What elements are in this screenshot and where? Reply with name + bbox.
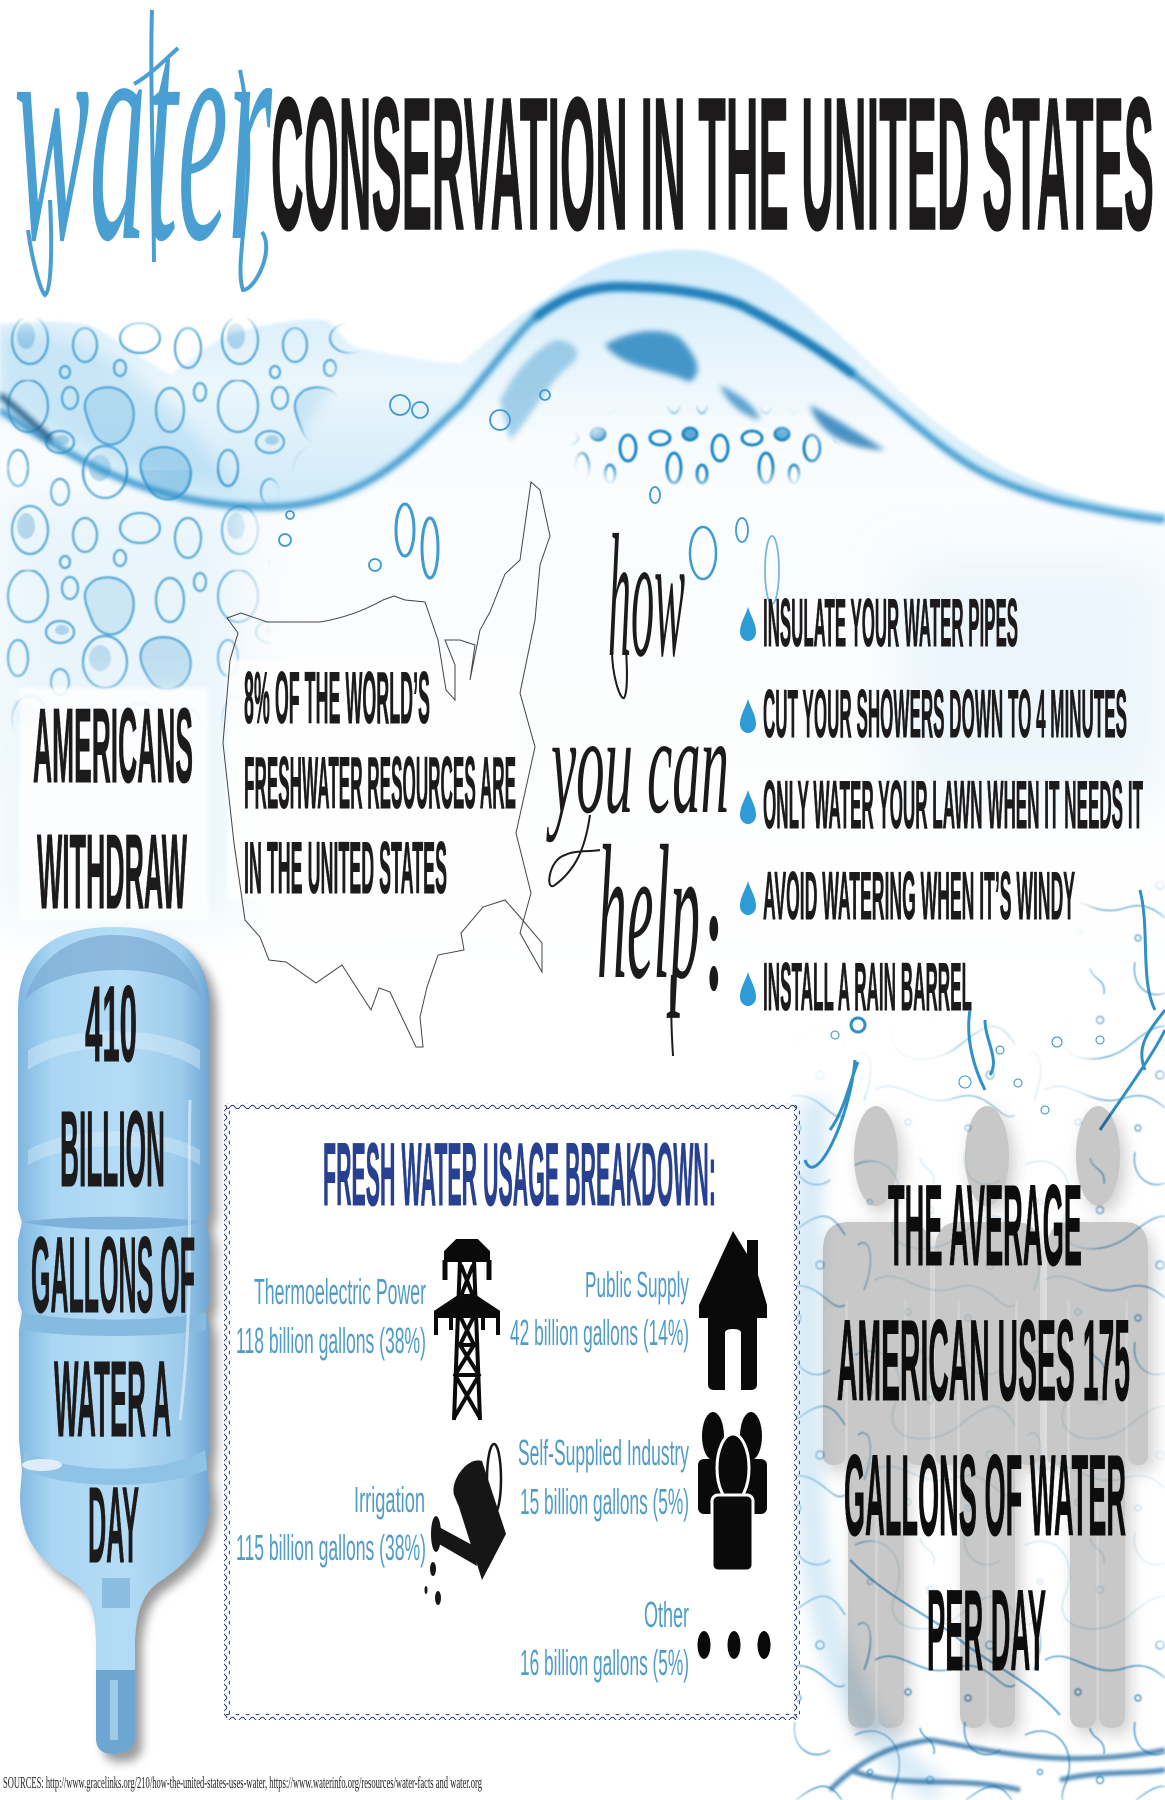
panel: usage breakdown: Self-Supplied Industry bbox=[518, 1432, 689, 1473]
white box behind Americans bbox=[19, 688, 208, 920]
US map outline bbox=[223, 482, 550, 1047]
text: DAY bbox=[88, 1465, 139, 1585]
text: 8 percent bbox=[244, 658, 516, 909]
text: 410 bbox=[85, 964, 137, 1084]
heading: how you can help: help bbox=[597, 806, 700, 1019]
heading: how you can help: : bbox=[705, 851, 723, 1024]
icon: people group bbox=[698, 1412, 767, 1571]
panel: usage breakdown: Other bbox=[644, 1594, 689, 1635]
icon: drop bbox=[740, 972, 756, 1006]
bubbles bbox=[279, 390, 779, 604]
label: public supply bbox=[510, 1264, 689, 1353]
panel: usage breakdown bbox=[224, 1103, 800, 1720]
text: WATER A bbox=[54, 1339, 171, 1459]
label: thermoelectric bbox=[236, 1271, 426, 1361]
text: BILLION bbox=[60, 1089, 165, 1209]
heading: how you can help: you can bbox=[546, 687, 729, 843]
panel: usage breakdown: 16 billion gallons (5%) bbox=[520, 1642, 689, 1683]
sources: SOURCES: http://www.gracelinks.org/210/how-the-united-states-uses-water, https://www.waterinfo.org/resources/water-facts and water.org bbox=[3, 1773, 482, 1792]
icon: drop bbox=[740, 790, 756, 824]
panel: usage breakdown: Public Supply bbox=[585, 1264, 689, 1305]
text: average American bbox=[837, 1161, 1130, 1695]
panel: usage breakdown: 115 billion gallons (38%) bbox=[236, 1527, 426, 1568]
label: irrigation: Irrigation bbox=[354, 1479, 425, 1520]
icon: drop bbox=[740, 881, 756, 915]
water splash bbox=[790, 880, 1165, 1800]
panel: usage breakdown: 42 billion gallons (14%) bbox=[510, 1312, 689, 1353]
text: IN THE UNITED STATES bbox=[244, 828, 447, 909]
icon: power tower bbox=[436, 1241, 498, 1420]
white box behind map label bbox=[227, 660, 517, 900]
icon: drop bbox=[740, 699, 756, 733]
label: other bbox=[520, 1594, 689, 1683]
water bottle bbox=[18, 927, 210, 1754]
panel: usage breakdown: Thermoelectric Power bbox=[254, 1271, 426, 1312]
icon: house bbox=[699, 1231, 767, 1390]
heading: how you can help: how bbox=[608, 498, 685, 694]
icon: watering can bbox=[424, 1444, 506, 1605]
label: irrigation bbox=[236, 1479, 426, 1568]
heading: how you can help bbox=[546, 498, 729, 1056]
panel: usage breakdown: 15 billion gallons (5%) bbox=[520, 1481, 689, 1522]
icon: drop bbox=[740, 607, 756, 641]
people silhouettes bbox=[823, 1106, 1148, 1728]
water wave background bbox=[0, 250, 1165, 1000]
text: 8% OF THE WORLD’S bbox=[244, 658, 430, 739]
text: Americans withdraw bbox=[33, 686, 193, 931]
icon: three dots bbox=[698, 1631, 770, 1659]
label: self-supplied industry bbox=[518, 1432, 689, 1522]
bottle text bbox=[31, 964, 195, 1585]
tips list bbox=[740, 585, 1143, 1025]
panel: usage breakdown: 118 billion gallons (38%) bbox=[236, 1320, 426, 1361]
